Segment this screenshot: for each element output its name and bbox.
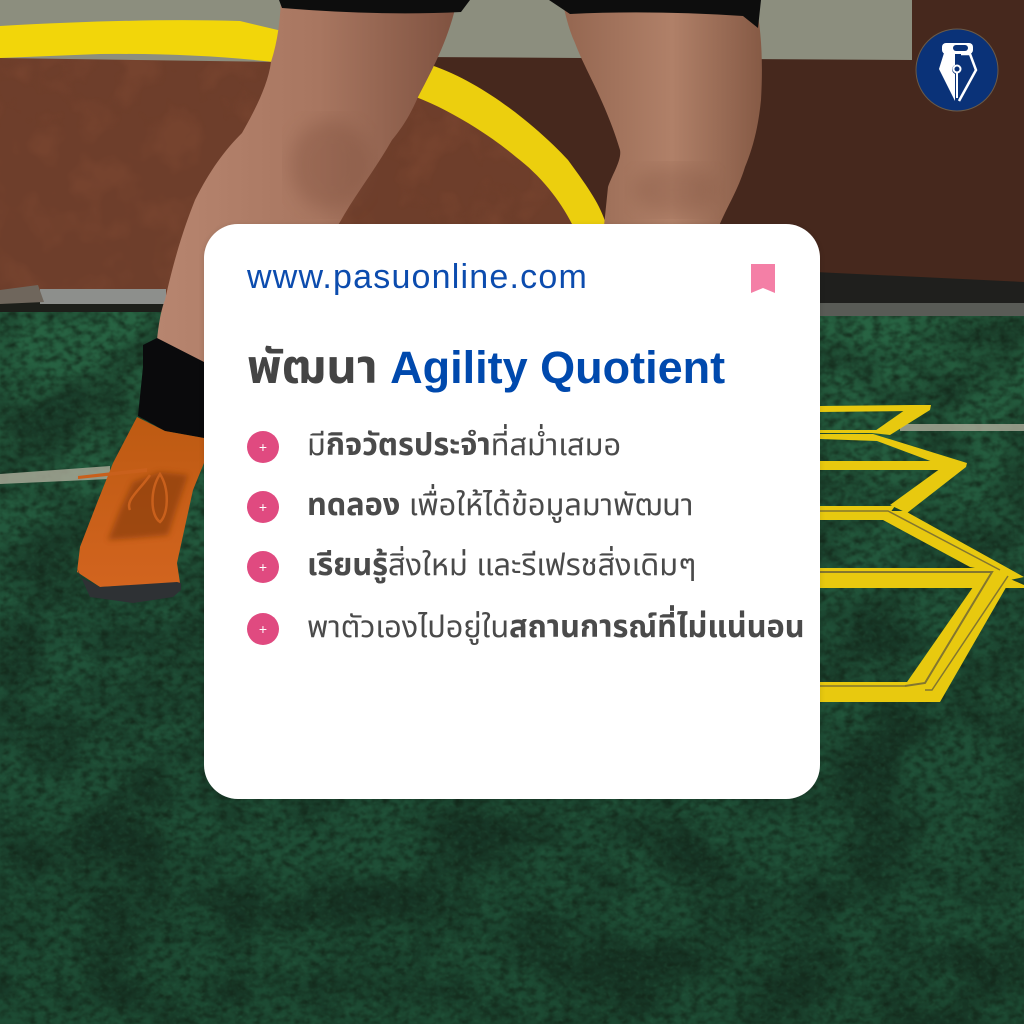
dark brown wall [420,0,1024,285]
bullet 2 [247,484,693,523]
right leg [562,0,762,226]
black sock [138,338,204,438]
white field line [0,424,1024,484]
left leg [150,0,457,420]
bullet text 2: ทดลอง เพื่อให้ได้ข้อมูลมาพัฒนา [307,487,693,522]
bullet 1: + [259,439,267,455]
card shadow [204,225,820,800]
logo badge: pen nib [916,28,998,112]
bullet 4 [247,605,805,645]
turf ground [0,308,1024,1024]
yellow curved line [0,20,606,224]
mesh backdrop [0,0,1024,120]
bullet 2: + [259,499,267,515]
white card panel [204,224,820,799]
website url: www.pasuonline.com [247,258,588,296]
icon: bookmark [751,264,775,293]
heading: พัฒนา Agility Quotient [247,341,725,394]
brown rust wall left [0,58,572,295]
icon: pen nib [939,43,976,101]
bullet text 3: เรียนรู้สิ่งใหม่ และรีเฟรชสิ่งเดิมๆ [307,547,696,582]
bullet 4: + [259,621,267,637]
orange shoe [77,417,204,603]
bullet 1 [247,424,621,463]
bullet text 1: มีกิจวัตรประจำที่สม่ำเสมอ [307,427,621,462]
agility ladder [820,405,1024,702]
bullet 3 [247,546,696,584]
fence pipes [0,272,1024,316]
bullet text 4: พาตัวเองไปอยู่ในสถานการณ์ที่ไม่แน่นอน [307,609,805,644]
bullet 3: + [259,559,267,575]
shorts [279,0,761,28]
